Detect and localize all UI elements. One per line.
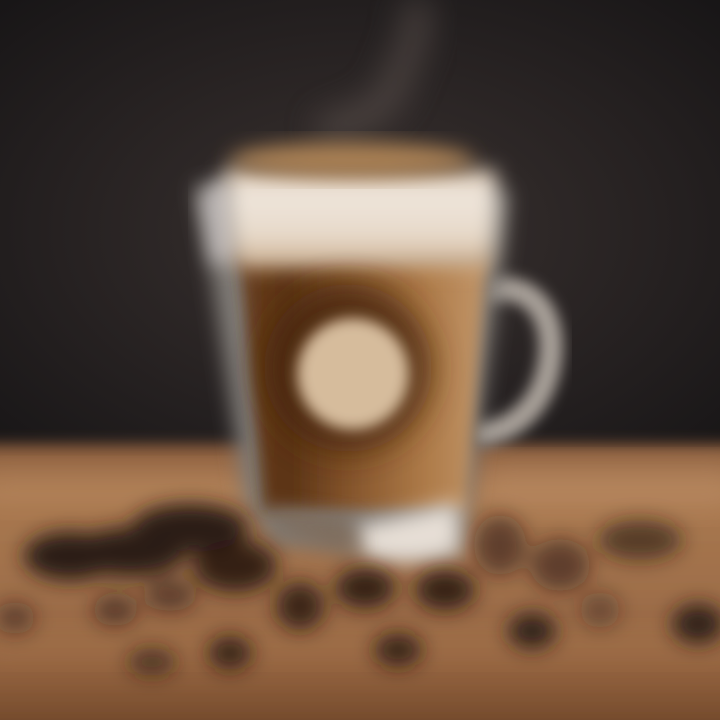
logo circle [297,318,409,430]
white milk base [352,502,460,562]
cup glass outer [195,185,510,555]
coffee layer [240,258,486,510]
cup [195,142,510,562]
rim highlight left [200,172,240,265]
background wall [0,0,720,460]
wooden table [0,444,720,720]
coffee beans [0,504,720,676]
steam [318,0,417,132]
mug handle [482,289,551,434]
logo dark ring [264,284,432,452]
foam layer [226,168,497,268]
latte surface [230,142,474,178]
